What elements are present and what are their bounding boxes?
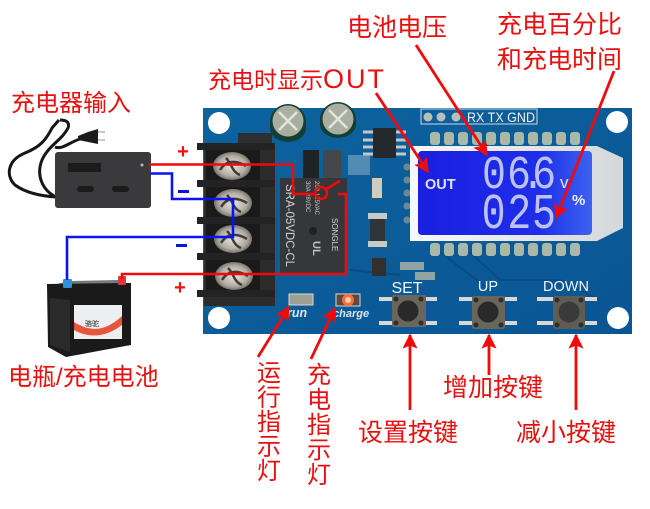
percent reading: 5 — [532, 186, 556, 243]
panel: circuit board — [203, 108, 632, 334]
label: run indicator: 指 — [257, 409, 281, 436]
charger — [9, 120, 151, 208]
arrow: down button — [575, 335, 577, 410]
label: run indicator: 运 — [257, 360, 281, 387]
arrow: run indicator — [258, 307, 289, 357]
UP button — [459, 279, 517, 329]
battery — [47, 276, 131, 357]
battery positive terminal — [118, 276, 126, 285]
charger plug — [78, 129, 98, 144]
percent reading: 2 — [507, 186, 531, 243]
polarity mark: battery plus: + — [174, 277, 186, 299]
small chips and diodes — [238, 128, 435, 280]
terminal block — [197, 143, 275, 306]
polarity mark: battery minus — [176, 244, 187, 247]
arrow: OUT display — [376, 93, 428, 172]
voltage reading: . — [521, 150, 545, 203]
screw 2 — [206, 187, 260, 217]
voltage reading: 6 — [507, 150, 531, 203]
LCD pins — [430, 132, 580, 256]
charger cable — [9, 120, 80, 197]
arrow: charge indicator — [311, 308, 335, 359]
arrow: set button — [409, 335, 411, 410]
screw 1 — [206, 150, 260, 180]
arrow: up button — [488, 335, 490, 375]
label: charge indicator: 充 — [307, 362, 331, 389]
relay — [280, 178, 347, 273]
SET button — [379, 280, 437, 327]
label: charge time: 和充电时间 — [497, 46, 622, 74]
red wire: charger to relay and battery — [122, 164, 346, 279]
charger plug prongs — [98, 132, 105, 140]
relay brand text: SONGLE — [330, 218, 339, 251]
voltage reading: 0 — [482, 150, 506, 203]
OUT indicator: OUT — [425, 177, 456, 193]
label: battery voltage: 电池电压 — [347, 14, 447, 42]
arrow: charge percent and time — [556, 71, 614, 218]
blue wire: charger to battery — [67, 174, 233, 280]
DOWN label: DOWN — [543, 279, 589, 295]
label: charge indicator: 灯 — [307, 462, 331, 489]
DOWN button — [537, 279, 597, 329]
label: charge indicator: 示 — [307, 437, 331, 464]
header label: RX TX GND — [467, 110, 535, 125]
battery negative terminal — [63, 279, 72, 288]
capacitors — [270, 102, 356, 142]
label: OUT shown while charging: 充电时显示OUT — [208, 64, 386, 94]
relay rating text: 30A 28VDC — [304, 181, 310, 213]
arrow: battery voltage — [416, 45, 487, 155]
label: charge percent: 充电百分比 — [497, 11, 622, 39]
serial header — [421, 109, 537, 125]
relay rating text line two: 20A 125VAC — [313, 181, 319, 216]
percent unit: % — [572, 192, 585, 209]
relay certification mark: UL — [310, 241, 322, 256]
LCD display — [410, 146, 623, 243]
charger body — [55, 152, 151, 208]
label: down button: 减小按键 — [516, 419, 616, 447]
label: charge indicator: 电 — [307, 387, 331, 414]
percent reading: 0 — [482, 186, 506, 243]
battery brand: 骆驼 — [85, 319, 99, 328]
label: run indicator: 灯 — [257, 458, 281, 485]
label: set button: 设置按键 — [358, 419, 458, 447]
UP label: UP — [478, 279, 498, 295]
polarity mark: charger plus: + — [177, 141, 189, 163]
run and charge LEDs — [287, 294, 369, 320]
charge label: charge — [333, 308, 369, 320]
relay model text: SRA-05VDC-CL — [283, 184, 295, 268]
polarity mark: charger minus — [178, 190, 189, 193]
label: run indicator: 行 — [257, 384, 281, 412]
label: charge indicator: 指 — [307, 412, 331, 439]
voltage unit: v — [560, 173, 569, 192]
screw 3 — [206, 224, 260, 253]
screw 4 — [206, 260, 260, 290]
label: battery: 电瓶/充电电池 — [8, 364, 159, 391]
label: charger input: 充电器输入 — [11, 90, 131, 117]
label: run indicator: 示 — [257, 434, 281, 460]
label: up button: 增加按键 — [443, 374, 543, 402]
voltage reading: 6 — [532, 150, 556, 203]
SET label: SET — [391, 280, 423, 297]
run label: run — [287, 306, 308, 320]
